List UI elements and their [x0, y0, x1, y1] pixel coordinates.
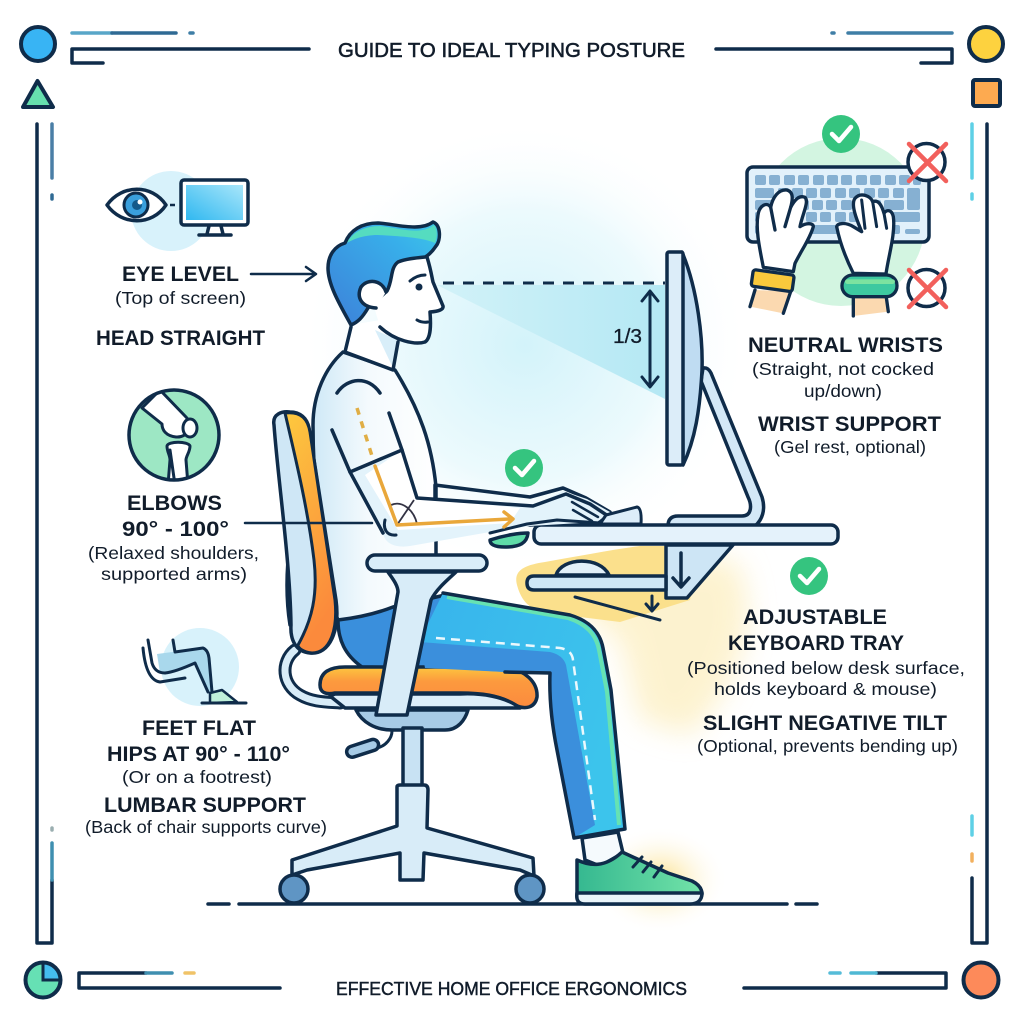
- note: supported arms: supported arms): [101, 564, 247, 584]
- panel: eye level: [96, 171, 265, 350]
- hair: [328, 222, 439, 325]
- monitor body: [682, 252, 702, 465]
- heading: feet flat: FEET FLAT: [142, 717, 256, 740]
- pants and seat: [320, 593, 625, 838]
- right forearm: [853, 295, 888, 316]
- shoe: [577, 852, 702, 894]
- seat pan: [330, 694, 520, 708]
- pointer line: elbows: [245, 522, 372, 524]
- note: holds: holds keyboard & mouse): [714, 679, 937, 699]
- heading: lumbar: LUMBAR SUPPORT: [104, 794, 306, 817]
- panel: wrists: [747, 115, 946, 457]
- monitor: [667, 252, 764, 526]
- note: lumbar: (Back of chair supports curve): [85, 817, 327, 837]
- dashed seam: [436, 638, 595, 820]
- note: straight: (Straight, not cocked: [752, 359, 934, 379]
- right caster: [516, 875, 544, 903]
- shoulder arc: [337, 381, 380, 393]
- arrow: eye level: [251, 267, 316, 281]
- brow and mouth: [410, 275, 428, 322]
- desk top: [534, 525, 838, 544]
- orange angle arrow: [375, 466, 513, 527]
- arrow: tilt: [646, 596, 658, 611]
- heading: adjustable: ADJUSTABLE: [743, 606, 887, 629]
- armrest: [367, 555, 487, 715]
- arrow: down: [673, 553, 689, 587]
- panel: keyboard tray: [687, 606, 965, 756]
- note: gel rest: (Gel rest, optional): [774, 437, 926, 457]
- leg: [420, 593, 625, 838]
- icon: coral circle: [964, 962, 998, 998]
- label: 1/3: 1/3: [613, 326, 642, 348]
- check badge: arm: [505, 449, 543, 487]
- background glow behind gaze: [300, 120, 750, 570]
- gas column: [403, 728, 422, 788]
- title: GUIDE TO IDEAL TYPING POSTURE: [338, 40, 685, 62]
- monitor stand: [668, 368, 764, 526]
- face: [372, 257, 443, 343]
- backrest shell: [274, 412, 337, 653]
- icon: leg: [143, 628, 246, 706]
- lumbar adjuster: [287, 543, 303, 625]
- heading: negative tilt: SLIGHT NEGATIVE TILT: [703, 712, 947, 735]
- left hand: [757, 190, 813, 272]
- one-third measure: [613, 291, 658, 387]
- ear: [359, 281, 386, 308]
- check badge: tray: [790, 557, 828, 595]
- backrest: [274, 412, 337, 653]
- eye: [416, 284, 422, 290]
- footer title: EFFECTIVE HOME OFFICE ERGONOMICS: [336, 979, 687, 999]
- gel wrist rest: [490, 533, 528, 547]
- heading: keyboard tray: KEYBOARD TRAY: [728, 632, 904, 655]
- chair: [285, 543, 340, 703]
- armrest pad: [367, 555, 487, 571]
- note: up down: up/down): [804, 381, 882, 401]
- green highlight: [447, 597, 619, 825]
- tilt line: [575, 597, 660, 620]
- seat cushion: [320, 667, 537, 708]
- panel: feet: [85, 628, 327, 837]
- fingers: [572, 502, 598, 521]
- desk bracket: [666, 545, 733, 598]
- hip: [338, 595, 445, 668]
- neck: [345, 320, 398, 370]
- torso: [313, 352, 436, 640]
- seat hub: [356, 710, 468, 730]
- mouse: [556, 561, 609, 575]
- icon: green triangle: [23, 81, 53, 107]
- yellow glow behind tray and leg: [516, 546, 747, 735]
- heading: eye level: EYE LEVEL: [122, 263, 239, 286]
- head: [328, 222, 443, 370]
- note: shoulders: (Relaxed shoulders,: [88, 543, 259, 563]
- icon: yellow circle: [969, 27, 1003, 61]
- icon: pie clock: [26, 962, 60, 998]
- upper arm: [350, 450, 610, 547]
- leg shadow: [420, 642, 595, 838]
- sock: [582, 832, 623, 866]
- icon: orange square: [973, 80, 1000, 106]
- heading: wrist support: WRIST SUPPORT: [758, 413, 941, 436]
- upper arm guide dashes: [357, 408, 372, 456]
- heading: neutral wrists: NEUTRAL WRISTS: [748, 334, 943, 357]
- panel: elbows: [88, 390, 259, 584]
- heading: angle: 90° - 100°: [122, 518, 229, 541]
- left forearm: [750, 290, 791, 313]
- note: footrest: (Or on a footrest): [122, 767, 272, 787]
- gaze triangle: [437, 285, 665, 399]
- check badge: keyboard: [822, 115, 860, 153]
- floor line: [208, 902, 817, 906]
- note: top of screen: (Top of screen): [115, 288, 246, 308]
- heading: hips: HIPS AT 90° - 110°: [107, 743, 290, 766]
- cross: bottom: [908, 270, 946, 307]
- left caster: [280, 875, 308, 903]
- height lever: [345, 731, 392, 759]
- cross: top: [908, 144, 946, 181]
- heading: head straight: HEAD STRAIGHT: [96, 327, 265, 350]
- dashed eye line: [443, 282, 665, 284]
- heading: elbows: ELBOWS: [127, 492, 222, 515]
- icon: eye and monitor: [107, 171, 248, 251]
- icon: joint: [129, 390, 219, 485]
- elbow angle arc: [391, 500, 417, 525]
- backrest pad: [285, 413, 336, 653]
- sleeve: [332, 413, 402, 472]
- keyboard on desk: [600, 507, 641, 524]
- star base: [292, 785, 534, 880]
- keyboard tray: [527, 561, 666, 620]
- icon: blue circle: [21, 27, 55, 61]
- yellow glow behind shoe: [592, 826, 728, 934]
- far arm: [435, 485, 610, 525]
- note: positioned: (Positioned below desk surface,: [687, 658, 965, 678]
- left wristband: [751, 270, 794, 292]
- armrest post: [376, 572, 456, 715]
- arrow: one third: [642, 291, 658, 387]
- note: tilt: (Optional, prevents bending up): [697, 736, 958, 756]
- icon: keyboard and hands: [747, 115, 946, 316]
- chair base: [280, 728, 544, 903]
- chair back frame: [285, 650, 340, 703]
- desk: [534, 525, 838, 598]
- tray: [527, 576, 666, 590]
- right hand: [837, 195, 894, 274]
- leg outline: [443, 593, 625, 838]
- right wristband: [842, 275, 897, 297]
- arm: [332, 381, 641, 547]
- sock and shoe: [577, 832, 702, 904]
